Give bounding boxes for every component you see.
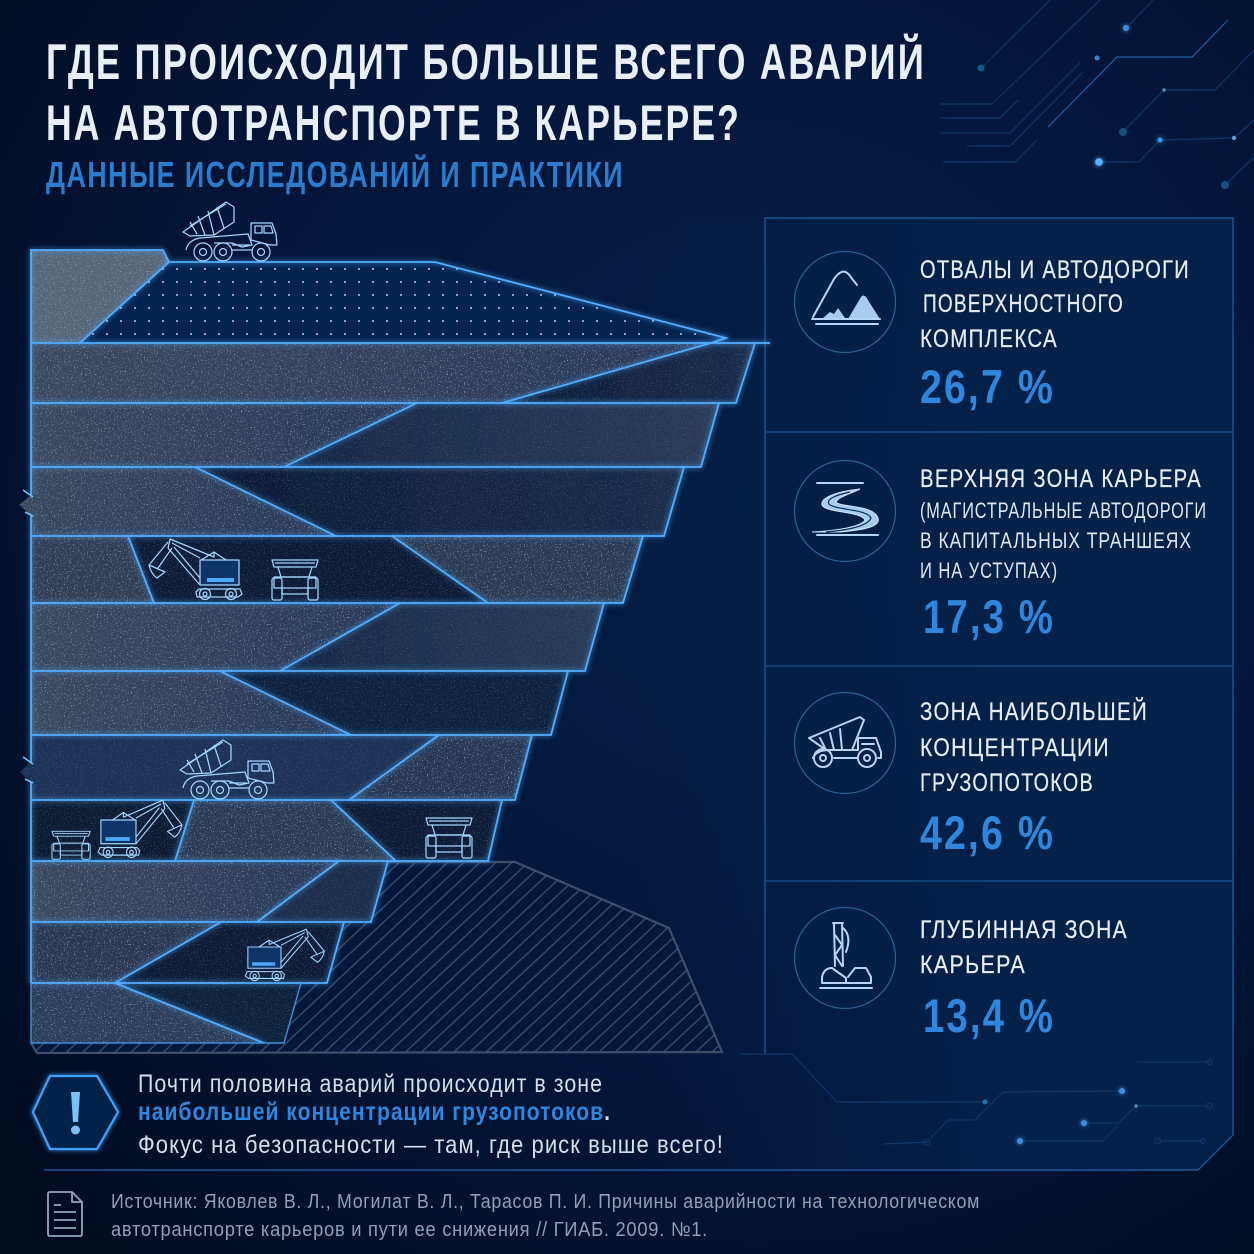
- hatched bedrock: [30, 860, 730, 1055]
- title: [46, 33, 926, 151]
- title: НА АВТОТРАНСПОРТЕ В КАРЬЕРЕ?: [46, 95, 741, 151]
- stat: upper zone: И НА УСТУПАХ): [920, 558, 1058, 583]
- callout: Фокус на безопасности — там, где риск выше всего!: [138, 1131, 724, 1159]
- stat: dumps: 26,7 %: [920, 360, 1055, 413]
- stat: dumps: [794, 252, 1190, 413]
- callout: наибольшей концентрации грузопотоков.: [138, 1098, 611, 1126]
- stat: upper zone: [794, 460, 1207, 643]
- stat: deep zone: КАРЬЕРА: [920, 951, 1026, 979]
- stat: highest concentration: 42,6 %: [920, 806, 1055, 859]
- stat: dumps: ПОВЕРХНОСТНОГО: [923, 290, 1124, 318]
- rock break marks on left edge: [23, 490, 33, 783]
- panel: quarry cross-section: [19, 202, 770, 1055]
- icon: document: [48, 1192, 82, 1236]
- outer frame line: [44, 218, 1233, 1170]
- stat: deep zone: [794, 908, 1128, 1042]
- decorative circuit traces top right: [940, 0, 1254, 189]
- stat: highest concentration: КОНЦЕНТРАЦИИ: [920, 734, 1110, 762]
- small truck lower left: [52, 831, 90, 859]
- stat: highest concentration: ЗОНА НАИБОЛЬШЕЙ: [920, 696, 1148, 726]
- decorative circuit traces bottom right: [740, 1054, 1212, 1145]
- dump truck mid bench: [180, 740, 274, 799]
- spoil dump with dots: [80, 262, 726, 343]
- stat: highest concentration: [794, 692, 1148, 859]
- stat: dumps: КОМПЛЕКСА: [920, 325, 1058, 353]
- icon: mountains: [794, 252, 896, 352]
- title: ГДЕ ПРОИСХОДИТ БОЛЬШЕ ВСЕГО АВАРИЙ: [46, 33, 926, 90]
- icon: drill rig: [794, 908, 896, 1008]
- subtitle: ДАННЫЕ ИССЛЕДОВАНИЙ И ПРАКТИКИ: [46, 153, 624, 195]
- source: автотранспорте карьеров и пути ее снижения // ГИАБ. 2009. №1.: [111, 1219, 708, 1241]
- rock benches dark: [20, 343, 755, 1043]
- excavator upper bench: [149, 539, 242, 600]
- dump truck on spoil dump: [183, 202, 277, 261]
- mining truck front view upper bench: [272, 560, 318, 600]
- icon: winding road: [794, 460, 896, 562]
- panel: statistics: [765, 252, 1233, 1042]
- mining truck front view right bench: [426, 818, 472, 858]
- excavator lower left: [98, 800, 182, 858]
- frame interior tint: [640, 218, 1233, 1170]
- glowing bench outlines: [31, 250, 770, 1043]
- stat: highest concentration: ГРУЗОПОТОКОВ: [920, 769, 1094, 797]
- stat: dumps: ОТВАЛЫ И АВТОДОРОГИ: [920, 256, 1190, 284]
- icon: warning hexagon: [33, 1076, 118, 1149]
- stat: upper zone: В КАПИТАЛЬНЫХ ТРАНШЕЯХ: [920, 528, 1192, 553]
- excavator deep bench: [245, 929, 324, 981]
- callout: Почти половина аварий происходит в зоне: [138, 1070, 603, 1098]
- stat: deep zone: ГЛУБИННАЯ ЗОНА: [920, 916, 1128, 944]
- rock benches light: [19, 250, 711, 1043]
- icon: dump truck: [794, 692, 896, 794]
- stat: deep zone: 13,4 %: [923, 989, 1055, 1042]
- source: Источник: Яковлев В. Л., Могилат В. Л., Тарасов П. И. Причины аварийности на технологическом: [111, 1191, 980, 1213]
- stat: upper zone: 17,3 %: [923, 590, 1055, 643]
- callout: [33, 1070, 724, 1159]
- source: [48, 1191, 980, 1241]
- deep bench thin outline: [31, 983, 301, 1043]
